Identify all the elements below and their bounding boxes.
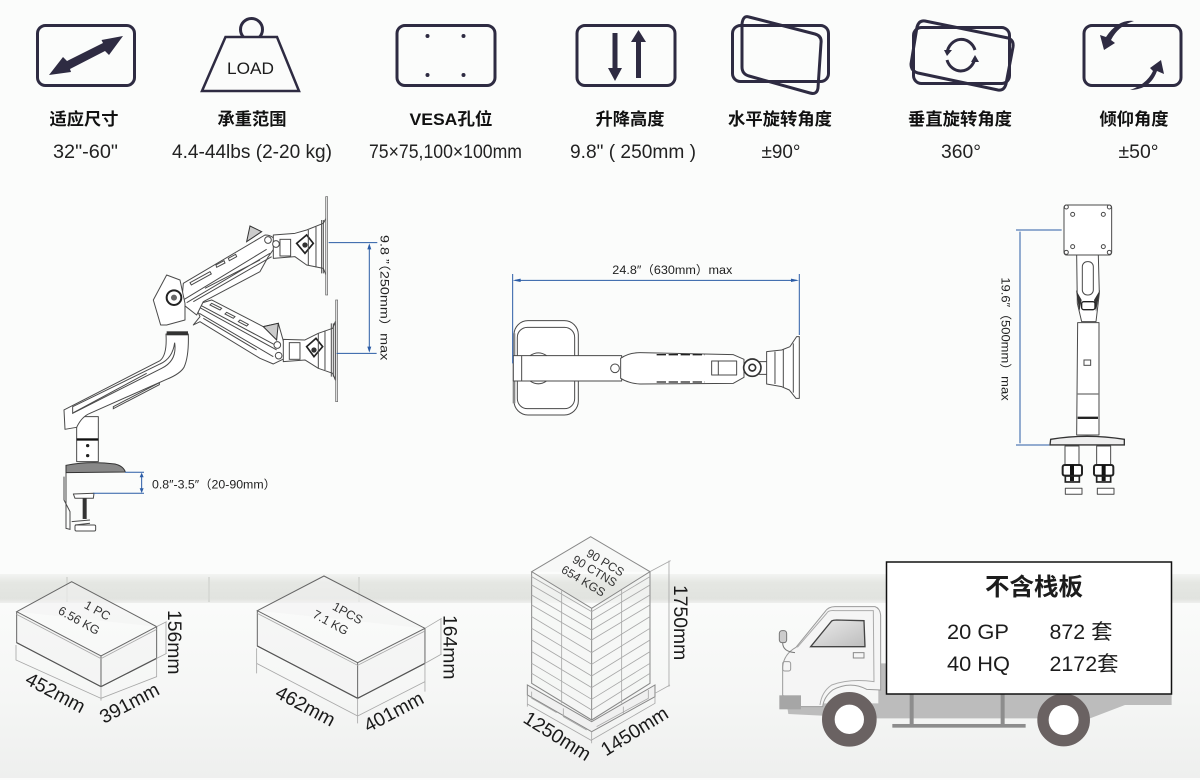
row: 20 GP: 872 套 bbox=[1050, 621, 1112, 644]
upper monitor tilt head bbox=[273, 218, 326, 275]
pallet base bbox=[527, 685, 655, 743]
dimension: clamp range bbox=[93, 472, 276, 493]
carton 1: 391mm bbox=[96, 680, 163, 728]
value: height lift: 9.8" ( 250mm ) bbox=[570, 142, 696, 163]
stacked cartons bbox=[532, 537, 650, 720]
panel: container capacity bbox=[886, 562, 1172, 694]
truck cab bbox=[779, 607, 881, 709]
clamp and desk base bbox=[64, 463, 125, 531]
icon: height lift arrows bbox=[577, 26, 675, 86]
post bbox=[77, 417, 98, 462]
heading: horizontal rotation: 水平旋转角度 bbox=[728, 109, 832, 129]
carton 1: 156mm bbox=[163, 610, 184, 674]
top view swivel and head bbox=[744, 337, 799, 398]
pallet dimensions: 1750mm bbox=[669, 585, 690, 660]
lower monitor tilt head bbox=[283, 322, 335, 380]
panel title: 不含栈板 bbox=[985, 574, 1083, 601]
front wheel bbox=[828, 698, 870, 740]
heading: screen size: 适应尺寸 bbox=[50, 109, 118, 129]
carton 1 bbox=[16, 582, 184, 728]
icon: screen size diagonal arrow bbox=[38, 26, 134, 86]
desk base plate bbox=[513, 321, 578, 415]
dimension: height travel bbox=[329, 235, 392, 360]
carton 2: 7.1 KG bbox=[310, 607, 351, 638]
front post bbox=[1077, 323, 1099, 435]
central pivot block bbox=[153, 275, 185, 325]
pallet stack bbox=[519, 537, 690, 766]
pallet top label: 90 PCS bbox=[584, 546, 627, 579]
pallet top label: 90 CTNS bbox=[570, 552, 619, 590]
upper monitor plate bbox=[326, 197, 328, 295]
pallet dimensions: 1250mm bbox=[519, 708, 594, 766]
front base bbox=[1050, 436, 1124, 445]
top view arm bbox=[513, 353, 744, 384]
front view arm drawing bbox=[998, 205, 1124, 494]
icon: load weight: LOAD bbox=[227, 59, 274, 78]
carton 2 bbox=[257, 576, 459, 737]
heading: VESA: VESA孔位 bbox=[410, 109, 492, 129]
clamp left bbox=[1063, 446, 1082, 494]
top view arm drawing bbox=[513, 263, 799, 415]
carton 2: 164mm bbox=[438, 615, 459, 679]
carton 2: 401mm bbox=[361, 688, 428, 737]
dimension: clamp range: 0.8″-3.5″（20-90mm） bbox=[152, 478, 276, 492]
truck bbox=[779, 607, 1172, 741]
value: tilt: ±50° bbox=[1118, 142, 1158, 163]
dimension: vertical reach: 19.6″（500mm）max bbox=[998, 277, 1012, 401]
truck chassis bbox=[787, 663, 1172, 728]
value: VESA sizes: 75×75,100×100mm bbox=[369, 142, 522, 163]
row: 20 GP: 20 GP bbox=[947, 621, 1009, 644]
pallet top label: 654 KGS bbox=[559, 562, 608, 600]
icon: horizontal rotation bbox=[732, 17, 828, 93]
value: screen size: 32"-60" bbox=[53, 142, 118, 163]
heading: tilt: 倾仰角度 bbox=[1100, 109, 1168, 129]
row: 40 HQ: 2172套 bbox=[1050, 653, 1118, 676]
pallet top label bbox=[559, 546, 627, 600]
carton 1: 452mm bbox=[22, 669, 88, 718]
dimension: reach: 24.8″（630mm）max bbox=[612, 263, 732, 277]
carton 2: 462mm bbox=[272, 683, 338, 731]
dimension: height travel: 9.8 ”（250mm）max bbox=[378, 235, 392, 360]
lower gas spring arm bbox=[193, 300, 285, 364]
lower support arm bbox=[64, 331, 188, 429]
lower monitor plate bbox=[336, 300, 338, 402]
clamp right bbox=[1094, 446, 1114, 494]
icon: VESA holes bbox=[397, 26, 495, 86]
icon: tilt arrows bbox=[1084, 21, 1181, 90]
carton 1: 1 PC bbox=[82, 598, 113, 623]
heading: height lift: 升降高度 bbox=[596, 109, 664, 129]
icon: vertical rotation bbox=[911, 21, 1013, 90]
side view arm drawing bbox=[64, 197, 392, 531]
neck bbox=[1076, 255, 1100, 322]
heading: vertical rotation: 垂直旋转角度 bbox=[908, 109, 1012, 129]
carton 2: 1PCS bbox=[330, 599, 365, 627]
heading: load range: 承重范围 bbox=[218, 109, 286, 129]
value: horizontal rotation: ±90° bbox=[762, 142, 800, 163]
value: load range: 4.4-44lbs (2-20 kg) bbox=[172, 142, 332, 163]
pallet dimensions: 1450mm bbox=[598, 703, 672, 761]
value: vertical rotation: 360° bbox=[941, 142, 981, 163]
row: 40 HQ bbox=[947, 653, 1118, 676]
icon: load weight bbox=[202, 18, 299, 91]
pallet dimensions bbox=[519, 561, 690, 766]
VESA plate bbox=[1064, 205, 1112, 255]
dimension: vertical reach bbox=[998, 230, 1062, 445]
dimension: reach bbox=[513, 263, 799, 363]
carton 1: 6.56 KG bbox=[56, 604, 102, 638]
row: 40 HQ: 40 HQ bbox=[947, 653, 1010, 676]
rear wheel bbox=[1043, 699, 1084, 741]
upper gas spring arm bbox=[182, 226, 277, 315]
row: 20 GP bbox=[947, 621, 1112, 644]
